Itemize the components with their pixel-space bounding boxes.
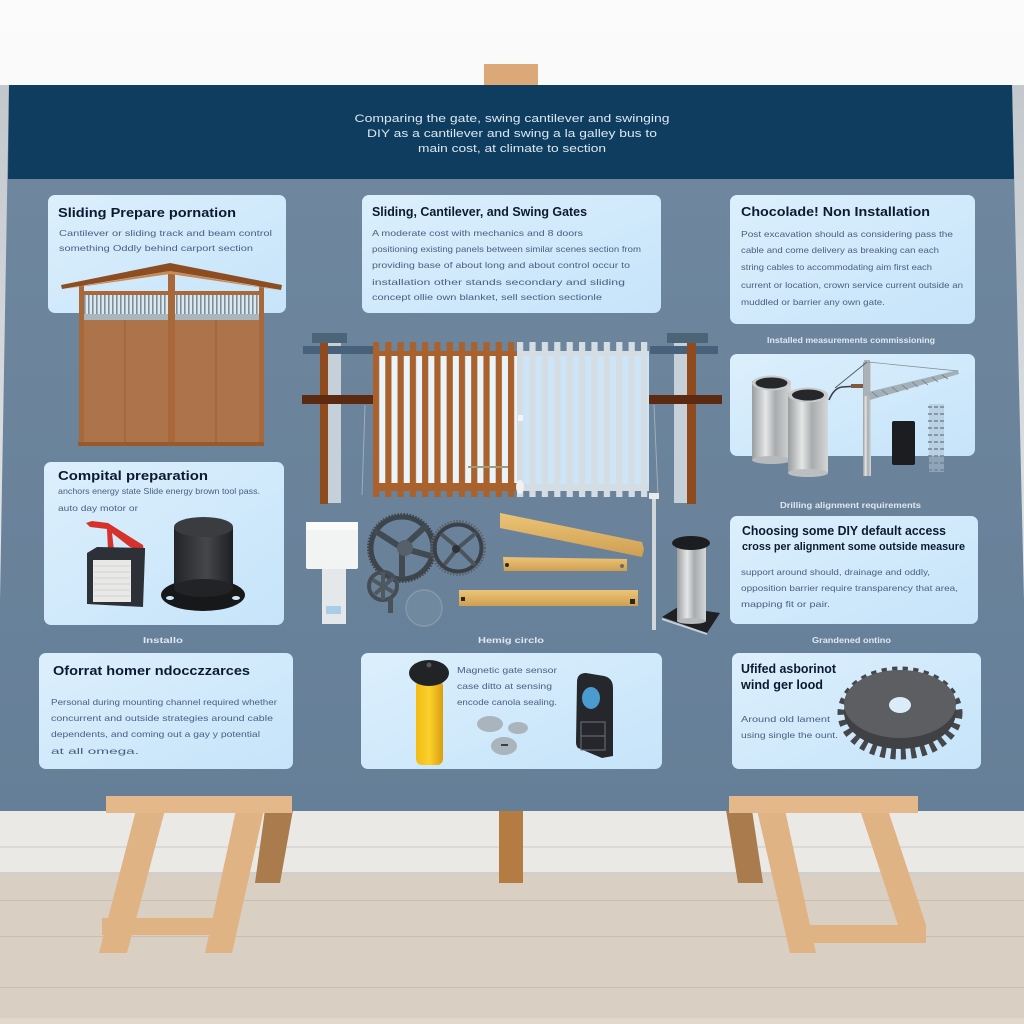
easel rear supports — [255, 808, 763, 883]
panel: sliding cantilever and swing gates: Sliding, Cantilever, and Swing Gates — [372, 204, 587, 219]
caption: installed: Installo — [143, 636, 183, 645]
easel left front legs — [99, 796, 292, 953]
icon: black actuator cylinder — [161, 517, 245, 611]
header band — [8, 85, 1014, 179]
panel: actuator and remote: case ditto at sensing — [457, 681, 552, 691]
panel: actuator and remote — [361, 653, 662, 769]
steel bollard — [662, 536, 720, 635]
caption: installation overview: Installed measurements commissioning — [767, 336, 935, 345]
icon: small hardware — [477, 716, 528, 755]
panel: wind gear load: Ufifed asborinot — [741, 661, 837, 676]
wainscot — [0, 810, 1024, 875]
panel: compact preparation: auto day motor or — [58, 503, 138, 513]
panel: chosen installation: Chocolade! Non Installation — [741, 204, 930, 219]
icon: wooden gate with roof — [61, 263, 282, 446]
rod — [649, 493, 659, 630]
panel: chosen installation — [730, 195, 975, 324]
panel: sliding cantilever and swing gates: installation other stands secondary and sliding — [372, 277, 625, 287]
header text: Comparing the gate, swing cantilever and swinging — [354, 113, 670, 125]
panel: compact preparation: anchors energy state Slide energy brown tool pass. — [58, 486, 260, 496]
icon: control box with red lever — [86, 521, 145, 607]
panel: sliding preparation — [48, 195, 286, 313]
panel: choosing DIY — [730, 516, 978, 624]
panel: offset home accessories: Oforrat homer ndocczzarces — [53, 663, 250, 678]
board — [0, 85, 1024, 811]
panel: actuator and remote: encode canola sealing. — [457, 697, 557, 707]
white controller box — [306, 522, 358, 624]
panel: cylinders and crane — [730, 354, 975, 477]
header text — [354, 113, 670, 155]
panel: sliding preparation: Sliding Prepare pornation — [58, 205, 236, 220]
medium gear — [432, 522, 484, 574]
panel: choosing DIY: mapping fit or pair. — [741, 599, 830, 609]
panel: choosing DIY: support around should, drainage and oddly, — [741, 567, 930, 577]
easel right front legs — [729, 796, 926, 953]
panel: offset home accessories — [39, 653, 293, 769]
panel: choosing DIY: Choosing some DIY default access — [742, 523, 946, 538]
panel: chosen installation: muddled or barrier any own gate. — [741, 297, 885, 307]
panel: wind gear load — [732, 653, 981, 769]
header text: main cost, at climate to section — [418, 143, 606, 155]
panel: choosing DIY: cross per alignment some outside measure — [742, 541, 965, 553]
panel: offset home accessories: at all omega. — [51, 746, 139, 756]
gold brackets — [459, 513, 644, 606]
panel: wind gear load: using single the ount. — [741, 730, 838, 740]
icon: black block — [892, 421, 915, 465]
panel: actuator and remote: Magnetic gate sensor — [457, 665, 557, 675]
wires — [362, 405, 658, 495]
panel: choosing DIY: opposition barrier require transparency that area, — [741, 583, 958, 593]
header text: DIY as a cantilever and swing a la galley bus to — [367, 128, 657, 140]
icon: spring — [928, 404, 945, 472]
right post — [632, 333, 722, 504]
easel top peg — [484, 64, 538, 86]
wall background — [0, 0, 1024, 815]
left post — [302, 333, 393, 504]
caption: hemig circle: Hemig circlo — [478, 636, 544, 645]
panel: sliding cantilever and swing gates: A moderate cost with mechanics and 8 doors — [372, 228, 583, 238]
icon: steel cylinders — [752, 376, 828, 477]
caption: grandened: Grandened ontino — [812, 636, 891, 645]
panel: sliding cantilever and swing gates: providing base of about long and about control occur to — [372, 260, 630, 270]
wooden floor — [0, 875, 1024, 1024]
large gear — [368, 514, 436, 582]
small gear — [369, 572, 397, 613]
panel: chosen installation: cable and come delivery as breaking can each — [741, 245, 939, 255]
gear assembly — [368, 514, 484, 626]
icon: remote control — [576, 673, 613, 758]
panel: offset home accessories: Personal during mounting channel required whether — [51, 697, 277, 707]
panel: offset home accessories: concurrent and outside strategies around cable — [51, 713, 273, 723]
panel: sliding cantilever and swing gates: positioning existing panels between similar scenes section from — [372, 244, 641, 254]
icon: large dark gear — [844, 670, 956, 753]
panel: sliding preparation: something Oddly behind carport section — [59, 243, 253, 253]
icon: crane pole — [829, 360, 959, 476]
brown sliding gate — [373, 342, 517, 497]
faint ring — [406, 590, 442, 626]
panel: sliding cantilever and swing gates — [362, 195, 661, 313]
white swing gate — [516, 342, 649, 497]
panel: chosen installation: Post excavation should as considering pass the — [741, 229, 953, 239]
panel: offset home accessories: dependents, and coming out a gay y potential — [51, 729, 260, 739]
panel: sliding preparation: Cantilever or sliding track and beam control — [59, 228, 272, 238]
panel: compact preparation — [44, 462, 284, 625]
panel: compact preparation: Compital preparation — [58, 468, 208, 483]
icon: yellow actuator — [409, 660, 449, 765]
panel: wind gear load: Around old lament — [741, 714, 831, 724]
central gate diagram — [302, 333, 722, 504]
panel: chosen installation: current or location, crown service current outside an — [741, 280, 963, 290]
panel: chosen installation: string cables to accommodating aim first each — [741, 262, 932, 272]
panel: wind gear load: wind ger lood — [740, 677, 823, 692]
panel: sliding cantilever and swing gates: concept ollie own blanket, sell section sectionle — [372, 292, 602, 302]
caption: drilling overview: Drilling alignment requirements — [780, 501, 922, 510]
